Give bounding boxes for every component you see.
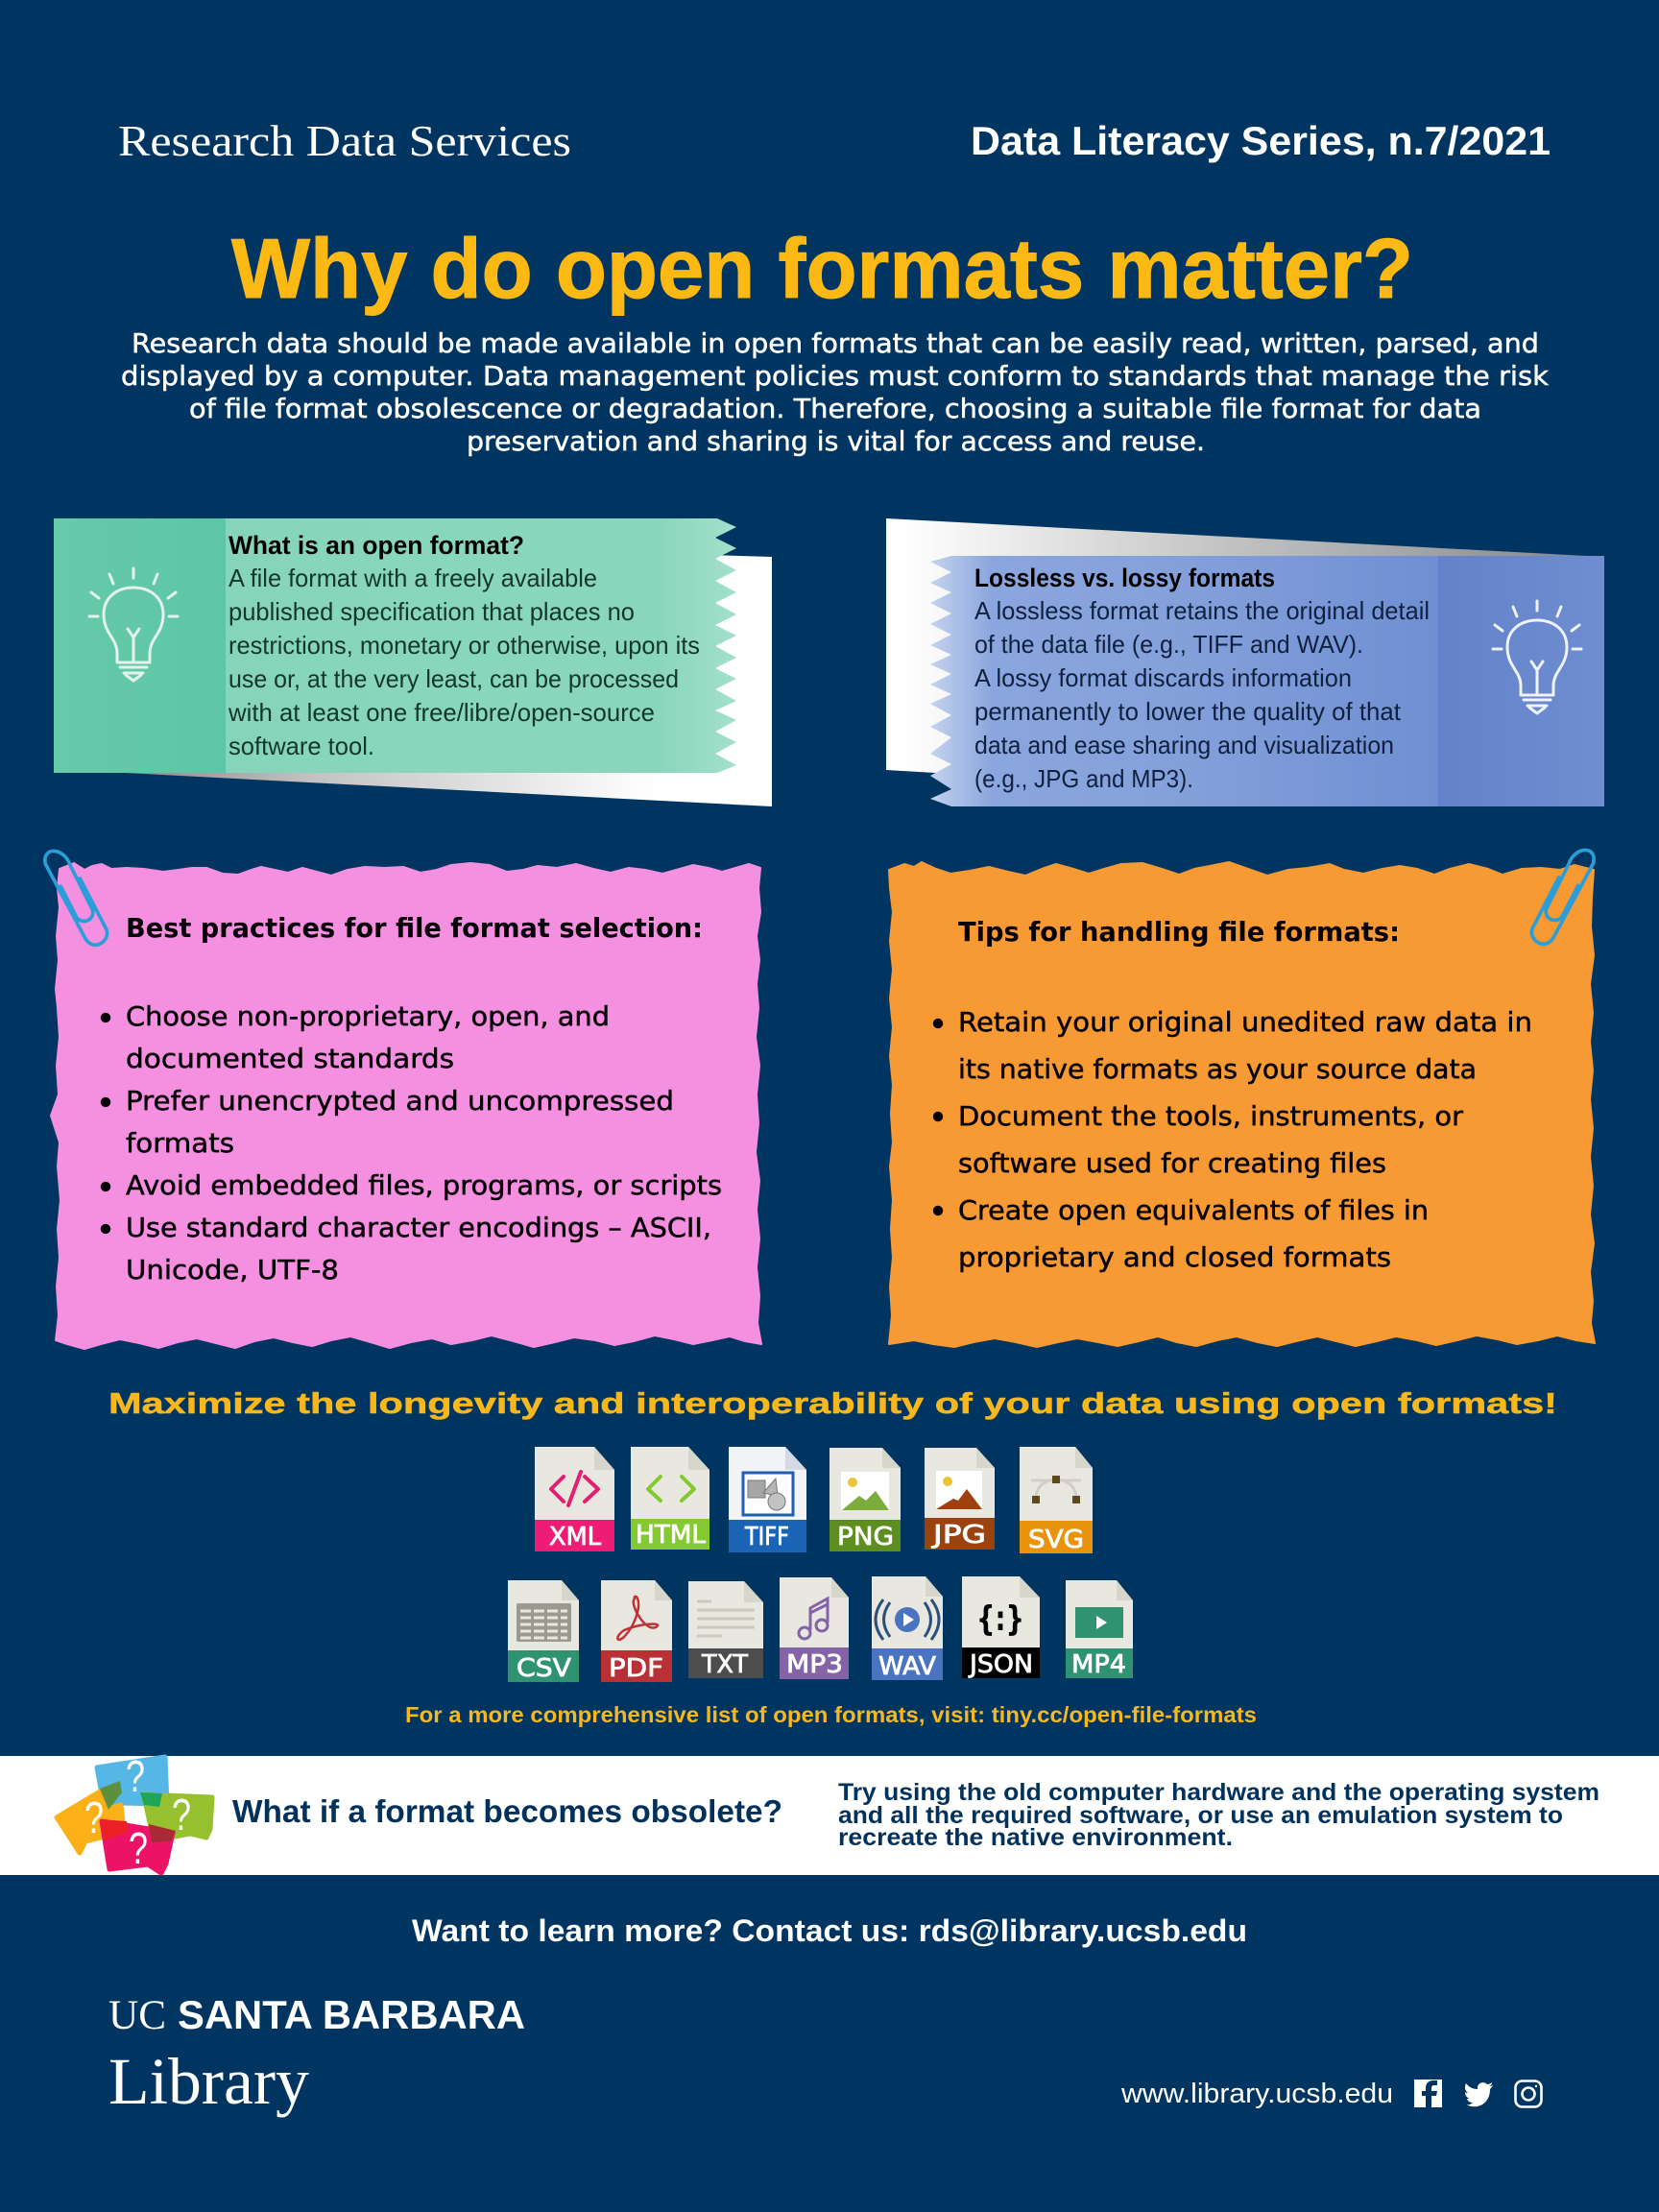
icon: XML file: XML <box>549 1523 602 1551</box>
text: open format definition <box>228 564 700 760</box>
panel: what is an open format <box>54 518 772 806</box>
icon: XML file <box>535 1447 614 1551</box>
list: tips: Create open equivalents of files in <box>958 1194 1429 1226</box>
intro paragraph: of file format obsolescence or degradation. Therefore, choosing a suitable file format for data <box>189 393 1481 424</box>
text: lossless and lossy definitions: permanently to lower the quality of that <box>974 697 1402 726</box>
header: series label: Data Literacy Series, n.7/2021 <box>971 118 1551 163</box>
list: best practices: Unicode, UTF-8 <box>126 1254 339 1286</box>
icon: PDF file: PDF <box>609 1654 663 1683</box>
website: www.library.ucsb.edu <box>1120 2079 1393 2109</box>
intro paragraph <box>121 327 1550 457</box>
header: Research Data Services: Research Data Services <box>118 117 571 165</box>
icon: TXT file: TXT <box>701 1650 748 1679</box>
icon: question speech bubbles: ? <box>126 1751 145 1801</box>
icon: WAV file: WAV <box>878 1652 936 1681</box>
heading: tips: Tips for handling file formats: <box>958 916 1400 948</box>
text: emulation advice <box>838 1779 1599 1851</box>
text: lossless and lossy definitions: A lossless format retains the original detail <box>974 596 1430 625</box>
subheading: maximize longevity: Maximize the longevity and interoperability of your data using open formats! <box>108 1386 1557 1420</box>
list: tips: Retain your original unedited raw data in <box>958 1006 1532 1038</box>
icon: SVG file <box>1020 1447 1093 1554</box>
icon: TIFF file <box>729 1447 806 1552</box>
logo: UC Santa Barbara Library: Library <box>108 2045 309 2118</box>
list: best practices: Use standard character encodings – ASCII, <box>126 1212 711 1243</box>
text: emulation advice: and all the required software, or use an emulation system to <box>838 1802 1563 1829</box>
list: tips: software used for creating files <box>958 1147 1386 1179</box>
icon: PNG file <box>830 1448 901 1551</box>
list: best practices: Prefer unencrypted and uncompressed <box>126 1085 674 1117</box>
heading: lossless vs lossy: Lossless vs. lossy formats <box>974 564 1275 592</box>
logo: UC Santa Barbara Library <box>108 1992 525 2118</box>
icon: light bulb <box>1493 601 1581 713</box>
icon: MP3 file <box>780 1577 849 1679</box>
list: tips: its native formats as your source data <box>958 1053 1477 1085</box>
text: open format definition: with at least one free/libre/open-source <box>228 698 655 727</box>
logo: UC Santa Barbara Library: SANTA BARBARA <box>178 1992 525 2037</box>
icon: JSON file <box>962 1576 1040 1679</box>
text: emulation advice: Try using the old computer hardware and the operating system <box>838 1779 1599 1806</box>
icon: light bulb <box>89 568 178 681</box>
intro paragraph: displayed by a computer. Data management policies must conform to standards that manage the risk <box>121 360 1550 392</box>
list: tips: proprietary and closed formats <box>958 1241 1391 1273</box>
icon: paperclip <box>45 851 108 945</box>
heading: what is an open format: What is an open format? <box>228 531 524 560</box>
list: best practices: Avoid embedded files, programs, or scripts <box>126 1169 722 1201</box>
heading: best practices: Best practices for file format selection: <box>126 912 703 944</box>
icon: PDF file <box>601 1580 672 1683</box>
panel: lossless vs lossy <box>886 518 1604 806</box>
title: Why do open formats matter? <box>231 221 1413 316</box>
icon: paperclip <box>1531 850 1594 944</box>
icon: facebook <box>1414 2080 1442 2107</box>
panel: tips <box>889 850 1595 1347</box>
icon: MP3 file: MP3 <box>786 1650 843 1679</box>
text: emulation advice: recreate the native environment. <box>838 1824 1233 1851</box>
list: best practices: documented standards <box>126 1043 454 1074</box>
text: lossless and lossy definitions <box>974 596 1430 793</box>
logo: UC Santa Barbara Library: UC <box>108 1993 166 2038</box>
text: open format definition: A file format with a freely available <box>228 564 597 592</box>
list: best practices: formats <box>126 1127 234 1159</box>
icon: TIFF file: TIFF <box>744 1523 789 1551</box>
icon: JSON file: JSON <box>968 1650 1033 1679</box>
icon: JPG file <box>925 1448 995 1550</box>
icon: question speech bubbles: ? <box>84 1792 104 1842</box>
icon: HTML file: HTML <box>636 1521 707 1550</box>
icon: MP4 file: MP4 <box>1071 1650 1126 1679</box>
icon: JSON file: {:} <box>976 1599 1024 1639</box>
list: tips: Document the tools, instruments, or <box>958 1100 1464 1132</box>
link to open formats list: For a more comprehensive list of open formats, visit: tiny.cc/open-file-formats <box>405 1702 1257 1727</box>
contact line: Want to learn more? Contact us: rds@library.ucsb.edu <box>412 1913 1247 1948</box>
icon: HTML file <box>631 1447 709 1550</box>
list: tips <box>933 1006 1532 1273</box>
text: open format definition: restrictions, monetary or otherwise, upon its <box>228 631 700 660</box>
icon: PNG file: PNG <box>837 1523 894 1551</box>
icon: SVG file: SVG <box>1028 1526 1084 1554</box>
panel: obsolete format band <box>0 1751 1659 1875</box>
heading: obsolete format question: What if a format becomes obsolete? <box>232 1793 782 1829</box>
icon: instagram <box>1515 2081 1542 2106</box>
icon: question speech bubbles: ? <box>129 1823 148 1873</box>
panel: best practices <box>45 851 761 1349</box>
text: open format definition: software tool. <box>228 732 374 760</box>
intro paragraph: preservation and sharing is vital for access and reuse. <box>467 425 1205 457</box>
icon: question speech bubbles <box>57 1751 212 1873</box>
list: best practices <box>101 1000 722 1286</box>
icon: WAV file <box>872 1576 943 1681</box>
icon: CSV file <box>508 1580 579 1683</box>
text: lossless and lossy definitions: of the data file (e.g., TIFF and WAV). <box>974 630 1363 659</box>
list: best practices: Choose non-proprietary, open, and <box>126 1000 610 1032</box>
text: lossless and lossy definitions: (e.g., JPG and MP3). <box>974 764 1193 793</box>
icon: question speech bubbles: ? <box>172 1790 191 1839</box>
icon: twitter <box>1465 2082 1493 2106</box>
text: lossless and lossy definitions: A lossy format discards information <box>974 663 1352 692</box>
intro paragraph: Research data should be made available in open formats that can be easily read, written, parsed, and <box>132 327 1539 359</box>
text: open format definition: use or, at the very least, can be processed <box>228 664 679 693</box>
icon: CSV file: CSV <box>517 1654 571 1683</box>
text: open format definition: published specification that places no <box>228 597 635 626</box>
icon: TXT file <box>688 1581 763 1679</box>
text: lossless and lossy definitions: data and ease sharing and visualization <box>974 731 1394 759</box>
icon: MP4 file <box>1066 1580 1133 1679</box>
icon: JPG file: JPG <box>930 1521 986 1550</box>
